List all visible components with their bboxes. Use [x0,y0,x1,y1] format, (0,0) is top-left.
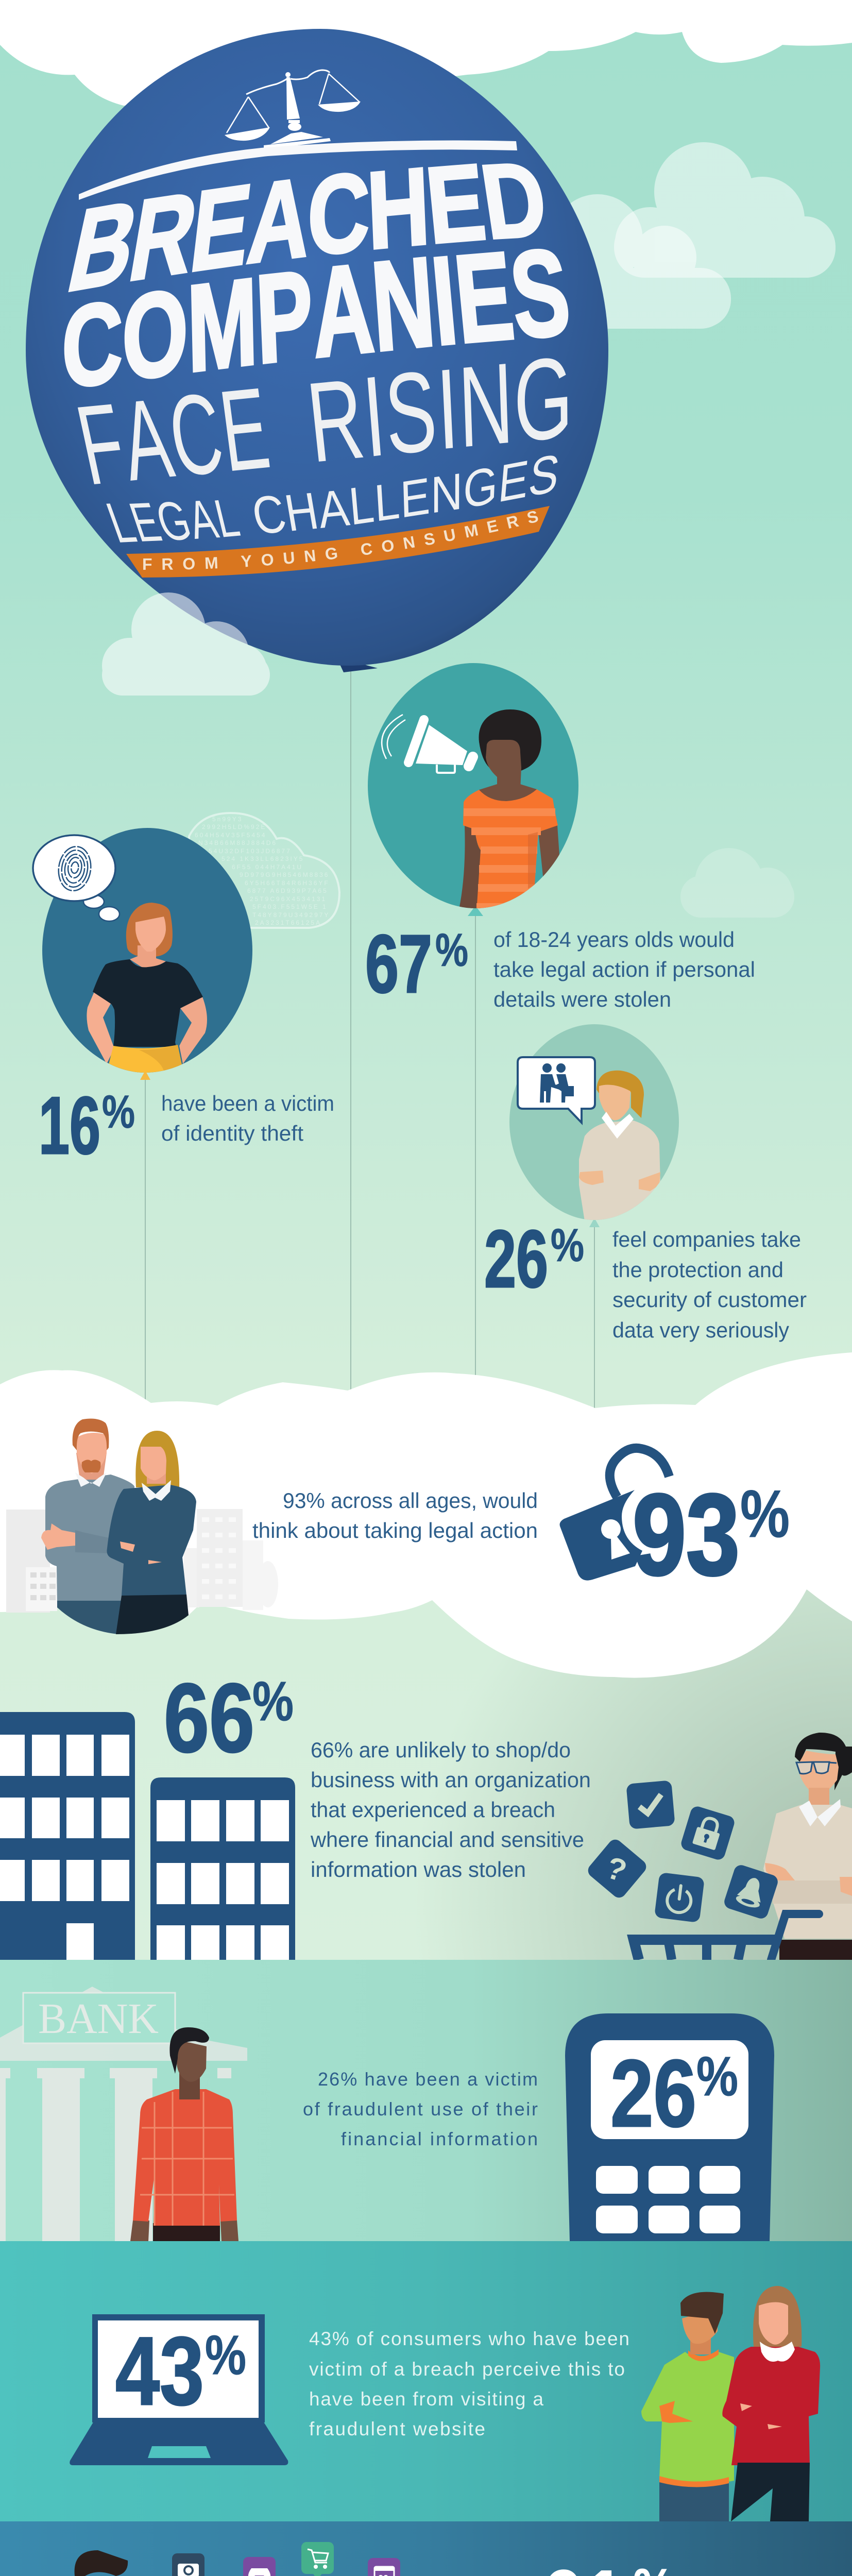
title line: LEGAL CHALLENGES: C [247,484,291,546]
title line: FACE RISING: I [359,352,389,481]
title line: FACE RISING: A [112,375,181,504]
data cloud with code: 604H54V35F5454 [195,832,266,839]
text: 66 percent: where financial and sensitive [310,1827,584,1852]
title line: LEGAL CHALLENGES: L [209,488,245,549]
text: 16 percent: have been a victim [161,1091,334,1115]
title line: LEGAL CHALLENGES: L [373,471,401,533]
title line: BREACHED: D [474,140,554,261]
icon: megaphone [382,715,473,773]
title line: LEGAL CHALLENGES: E [496,449,531,514]
title line: COMPANIES [61,223,576,413]
title line: BREACHED: A [244,154,315,287]
text: 66 percent: information was stolen [311,1857,526,1882]
title line: FACE RISING: R [302,354,369,486]
text: 66 percent: that experienced a breach [311,1798,555,1822]
section: 91 percent [0,2521,852,2576]
text: 93 percent: 93% across all ages, would [283,1488,538,1513]
buildings [0,1712,295,1960]
data cloud with code: 54U32DF103JD6877 [209,848,292,855]
couple: man and woman [41,1419,196,1634]
text: 43 percent: 43% of consumers who have been [309,2328,629,2349]
sky background [0,0,852,1963]
data cloud with code: T48Y879U349297Y [252,911,330,919]
stat: 26 percent: % [551,1220,584,1272]
data cloud with code: N34B66M88J884D6 [198,839,277,846]
text: 66 percent: 66% are unlikely to shop/do [311,1738,571,1762]
stat: 16 percent: % [102,1087,135,1138]
text: 26 percent fraud: of fraudulent use of their [303,2098,538,2120]
title line: BREACHED: C [306,148,371,279]
orange banner [126,506,550,578]
text: 93 percent [252,1488,538,1543]
data cloud with code: 2992H5LD%92E [202,823,266,831]
title line: BREACHED: H [365,144,432,272]
text: 67 percent: take legal action if personal [493,957,755,981]
title line: COMPANIES: E [449,225,519,369]
title line: BREACHED: E [421,142,490,266]
icon: check tile [626,1780,675,1829]
title line: BREACHED [58,140,554,317]
balloon: 16 percent [33,828,252,1080]
stat: 67 percent: % [435,925,468,976]
stat: 66 percent: % [252,1670,294,1732]
icon: power tile [654,1872,705,1923]
text: 26 percent fraud: 26% have been a victim [318,2069,538,2090]
icon: cart pin [301,2542,334,2576]
balloon: 26 percent [509,1024,679,1227]
section: 43 percent [0,2241,852,2521]
bank building [0,1987,247,2241]
title line: COMPANIES: N [367,230,439,378]
text: 26 percent fraud: financial information [341,2128,538,2149]
title line: LEGAL CHALLENGES: S [525,442,563,509]
icon: lock tile [679,1805,736,1861]
text: 26 percent: feel companies take [612,1227,801,1251]
speech bubble with handshake [518,1057,595,1123]
cloud: right lower [515,194,731,329]
icon: calculator: 26 [610,2041,696,2147]
figure: woman with afro [458,709,559,912]
title line: LEGAL CHALLENGES: H [281,482,322,542]
title line: LEGAL CHALLENGES: A [182,488,224,551]
cloud over balloon bottom [102,592,270,696]
main title balloon [26,29,608,672]
title line: BREACHED: B [58,176,149,317]
title line: FACE RISING [67,332,573,509]
balloon: 67 percent [368,663,578,916]
text: 67 percent: of 18-24 years olds would [493,927,735,952]
top white cloud [0,0,852,106]
figure: man with tablet [19,2550,178,2576]
text: 16 percent: of identity theft [161,1121,303,1145]
figure: woman in black top [87,903,207,1077]
title line: LEGAL CHALLENGES: G [462,455,499,520]
icon: scales of justice [225,70,361,149]
text: 16 percent [161,1091,334,1145]
text: 26 percent: data very seriously [612,1318,789,1342]
title line: COMPANIES: M [186,252,259,398]
text: 43 percent: have been from visiting a [309,2388,543,2410]
data cloud with code: 6877 A6D939P7A65 [247,887,328,894]
white cloud band [0,1352,852,1678]
icon: bell tile [723,1863,779,1920]
icon: question tile: ? [602,1850,631,1889]
stat: 67 percent: 67 [365,918,432,1010]
title line: FACE RISING: I [434,344,461,473]
text: 67 percent: details were stolen [493,987,671,1011]
text: 43 percent: victim of a breach perceive this to [309,2359,625,2380]
icon: padlock with 93 percent: % [740,1476,790,1551]
title line: COMPANIES: A [309,237,377,384]
icon: calculator [565,2013,774,2241]
figure: woman in beige [579,1071,660,1221]
title line: COMPANIES: C [61,276,124,413]
cloud: right upper [614,142,836,278]
city skyline [6,1509,278,1613]
data cloud with code: 5n99Y3 [212,816,243,823]
text: 26 percent [612,1227,807,1342]
title line: LEGAL CHALLENGES: N [431,462,463,524]
text: 43 percent [309,2328,629,2439]
figures: couple in green and red [641,2286,820,2521]
title line: BREACHED: R [122,167,205,306]
icon: laptop [70,2314,288,2465]
stat: 26 percent: 26 [484,1214,548,1304]
figure: woman with glasses [763,1733,852,1960]
title line: LEGAL CHALLENGES: L [347,474,377,537]
title line: FACE RISING: N [456,338,515,471]
title line: FACE RISING: S [381,346,440,479]
title line: FACE RISING: C [161,369,230,500]
title line: FACE RISING: E [213,363,276,496]
title line: COMPANIES: S [504,223,576,364]
figure: man in red shirt [130,2027,238,2241]
icon: camera pin [172,2553,205,2576]
title line: LEGAL CHALLENGES: G [149,490,198,552]
thought bubble with fingerprint [33,835,120,921]
data cloud with code: 6Y5H66T84R6H36YF [245,879,330,887]
title line: LEGAL CHALLENGES: L [99,490,143,554]
text: 43 percent: fraudulent website [309,2418,485,2439]
stat: 66 percent: 66 [164,1664,254,1773]
data cloud with code: 9D979G9H8546M8836 [240,871,329,878]
text: 26 percent: security of customer [612,1287,807,1312]
bank building: BANK [38,1995,159,2043]
title line: FACE RISING: F [67,379,135,509]
icon: laptop: 43 [115,2317,204,2425]
data cloud with code: 524 1K33LL6823IY5 [221,855,304,862]
text: 26 percent: the protection and [612,1258,783,1282]
data cloud with code: 2A3231T66125A [255,919,321,926]
data cloud with code: 5F403.F551W5E 1 [252,903,328,910]
title line: BREACHED: E [184,160,257,296]
icon: laptop: % [205,2324,246,2386]
text: 26 percent fraud [303,2069,538,2149]
title line: LEGAL CHALLENGES: E [123,492,168,554]
icon: game pin [243,2557,276,2576]
title line: LEGAL CHALLENGES: A [315,479,352,539]
section: bank [0,1960,852,2241]
data cloud with code [189,813,339,928]
title line: LEGAL CHALLENGES [99,442,563,554]
text: 67 percent [493,927,755,1011]
title line: COMPANIES: I [427,230,462,371]
icon: shopping cart [634,1914,819,1960]
icon: calendar pin [368,2558,400,2576]
text: 66 percent [310,1738,591,1882]
data cloud with code: 25T9C96X4534131 [250,895,327,903]
title line: FACE RISING: G [514,332,573,467]
icon: padlock with 93 percent [560,1448,790,1599]
title rule [79,140,517,200]
text: 93 percent: think about taking legal action [252,1518,538,1543]
title line: COMPANIES: P [253,244,316,391]
balloon strings [145,670,594,1422]
banner text: FROM YOUNG CONSUMERS [143,511,538,570]
icon: padlock with 93 percent: 93 [633,1470,740,1599]
icon: question tile [585,1837,649,1901]
stat: 16 percent: 16 [39,1080,100,1171]
cloud: small faint [680,848,794,918]
title line: LEGAL CHALLENGES: E [399,467,431,529]
text: 66 percent: business with an organization [311,1768,591,1792]
title line: COMPANIES: O [122,263,188,405]
icon: calculator: % [696,2045,738,2107]
data cloud with code: 6F55 044H7A41U [232,863,303,871]
